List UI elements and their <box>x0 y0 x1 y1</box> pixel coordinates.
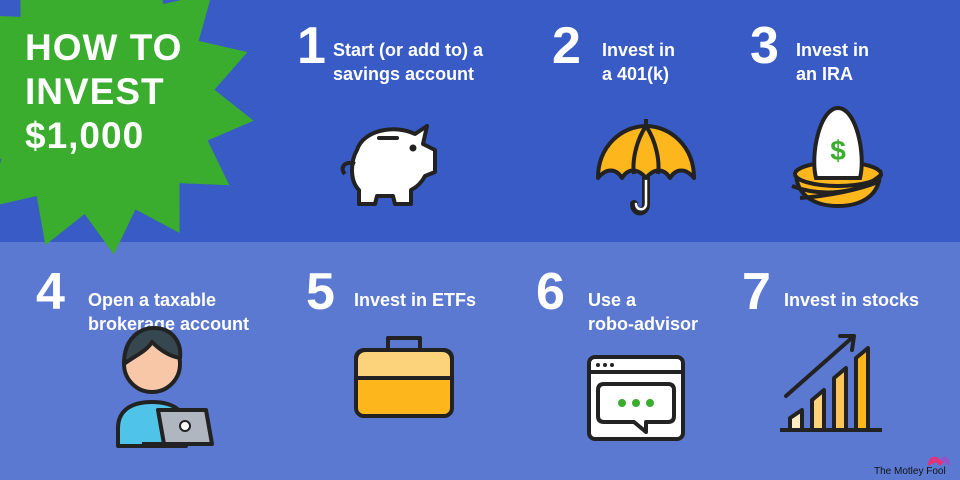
step 4: Open a taxable brokerage account <box>88 290 249 334</box>
title <box>25 27 182 156</box>
step 7 <box>742 263 919 432</box>
title: $1,000 <box>25 115 144 156</box>
step 7: 7 <box>742 263 771 321</box>
logo: The Motley Fool <box>874 456 950 477</box>
step 2 <box>552 17 696 216</box>
title: HOW TO <box>25 27 182 68</box>
icon: bar chart with arrow <box>780 334 882 432</box>
starburst badge <box>0 0 254 254</box>
step 4: 4 <box>36 263 65 321</box>
step 6: Use a <box>588 290 636 310</box>
step 1: 1 <box>297 17 326 75</box>
logo: The Motley Fool: The Motley Fool <box>874 466 946 477</box>
step 1 <box>297 17 484 206</box>
step 5: 5 <box>306 263 335 321</box>
step 2: Invest in <box>602 40 675 60</box>
step 2: a 401(k) <box>602 64 669 84</box>
icon: nest egg <box>791 106 884 208</box>
step 6 <box>536 263 698 441</box>
step 6: 6 <box>536 263 565 321</box>
icon: briefcase <box>354 336 454 418</box>
icon: person with laptop <box>116 326 214 448</box>
step 3: an IRA <box>796 64 853 84</box>
step 7: Invest in stocks <box>784 290 919 310</box>
step 4 <box>36 263 249 448</box>
icon: piggy bank <box>340 124 437 206</box>
step 2: 2 <box>552 17 581 75</box>
step 1: Start (or add to) a savings account <box>333 40 483 84</box>
title: INVEST <box>25 71 165 112</box>
step 3: Invest in <box>796 40 869 60</box>
icon: umbrella <box>596 119 696 216</box>
step 5: Invest in ETFs <box>354 290 476 310</box>
step 3 <box>750 17 884 208</box>
step 3: 3 <box>750 17 779 75</box>
step 6: robo-advisor <box>588 314 698 334</box>
top band <box>0 0 960 242</box>
icon: nest egg: $ <box>830 135 846 166</box>
icon: chat window <box>587 355 685 441</box>
step 5 <box>306 263 476 418</box>
